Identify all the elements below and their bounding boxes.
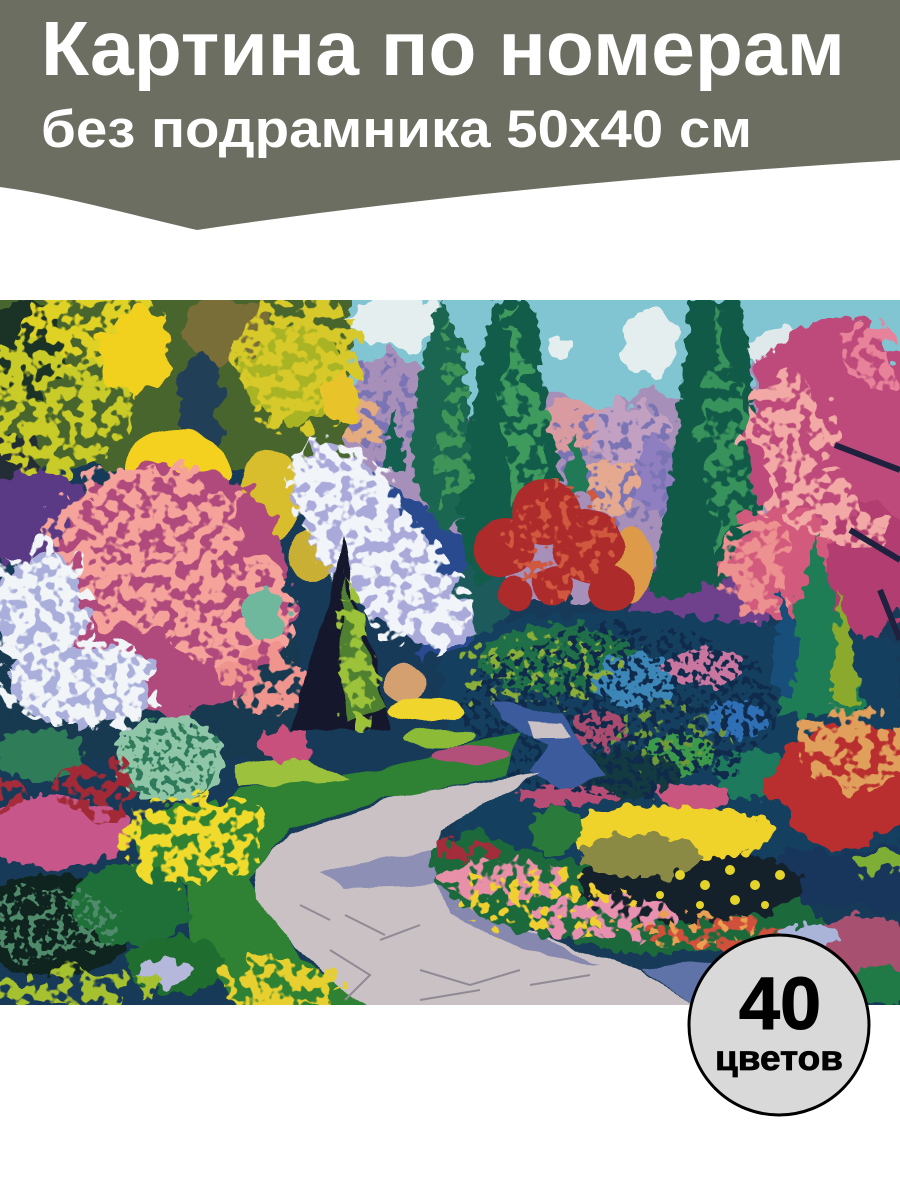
blue slope and purple shrub bbox=[370, 470, 772, 660]
sky bbox=[344, 300, 900, 420]
pink blossom mass bbox=[50, 465, 294, 715]
dark cypress highlights bbox=[338, 570, 388, 725]
yellow shrub bbox=[126, 430, 336, 581]
white blossom dabs bbox=[285, 430, 480, 655]
white blossom tree bbox=[240, 440, 475, 650]
dark cypress center bbox=[290, 535, 510, 764]
pink blossom dabs bbox=[50, 465, 303, 715]
flower bed yellow dabs bbox=[450, 870, 760, 946]
white blossom left dabs bbox=[0, 545, 160, 729]
title: Картина по номерам bbox=[41, 6, 845, 92]
grass and path bbox=[190, 700, 740, 1010]
pink tree blossoms bbox=[725, 320, 900, 615]
red maple tree bbox=[475, 476, 652, 613]
mountains bbox=[330, 350, 800, 600]
cypress highlights bbox=[440, 305, 760, 560]
badge label: цветов bbox=[715, 1039, 843, 1078]
green cypress right bbox=[770, 535, 870, 715]
white blossom left bbox=[0, 555, 152, 723]
header banner bbox=[0, 0, 900, 230]
left purple bbox=[0, 467, 86, 566]
badge number: 40 bbox=[739, 962, 821, 1045]
midground dabs bbox=[460, 630, 730, 765]
badge: 40 colours bbox=[689, 935, 869, 1115]
flower bed blossoms bbox=[437, 834, 780, 946]
path cracks bbox=[300, 905, 590, 1000]
mountain dabs bbox=[340, 365, 690, 535]
cypress trees bbox=[382, 300, 765, 600]
red orange bush bbox=[773, 723, 900, 910]
painting: garden landscape bbox=[0, 280, 900, 1010]
pink tree branches bbox=[835, 445, 900, 640]
subtitle: без подрамника 50х40 см bbox=[41, 100, 752, 159]
yellow flower dots bbox=[656, 865, 785, 909]
foliage dabs bbox=[0, 280, 360, 480]
mint shrub and dark bed dabs bbox=[0, 722, 220, 963]
midground dark dabs bbox=[460, 625, 780, 795]
solid yellow highlights bbox=[97, 308, 362, 426]
orange bush dabs bbox=[795, 710, 900, 790]
red maple highlights bbox=[505, 485, 615, 595]
bottom left flower dabs bbox=[0, 762, 345, 1010]
top left foliage bbox=[0, 300, 355, 480]
flower bed and mound right bbox=[430, 783, 830, 952]
bottom right corner bbox=[780, 915, 900, 1005]
pink tree right bbox=[727, 315, 900, 640]
dark garden midground bbox=[443, 610, 878, 808]
bottom left flowers base bbox=[0, 718, 313, 993]
